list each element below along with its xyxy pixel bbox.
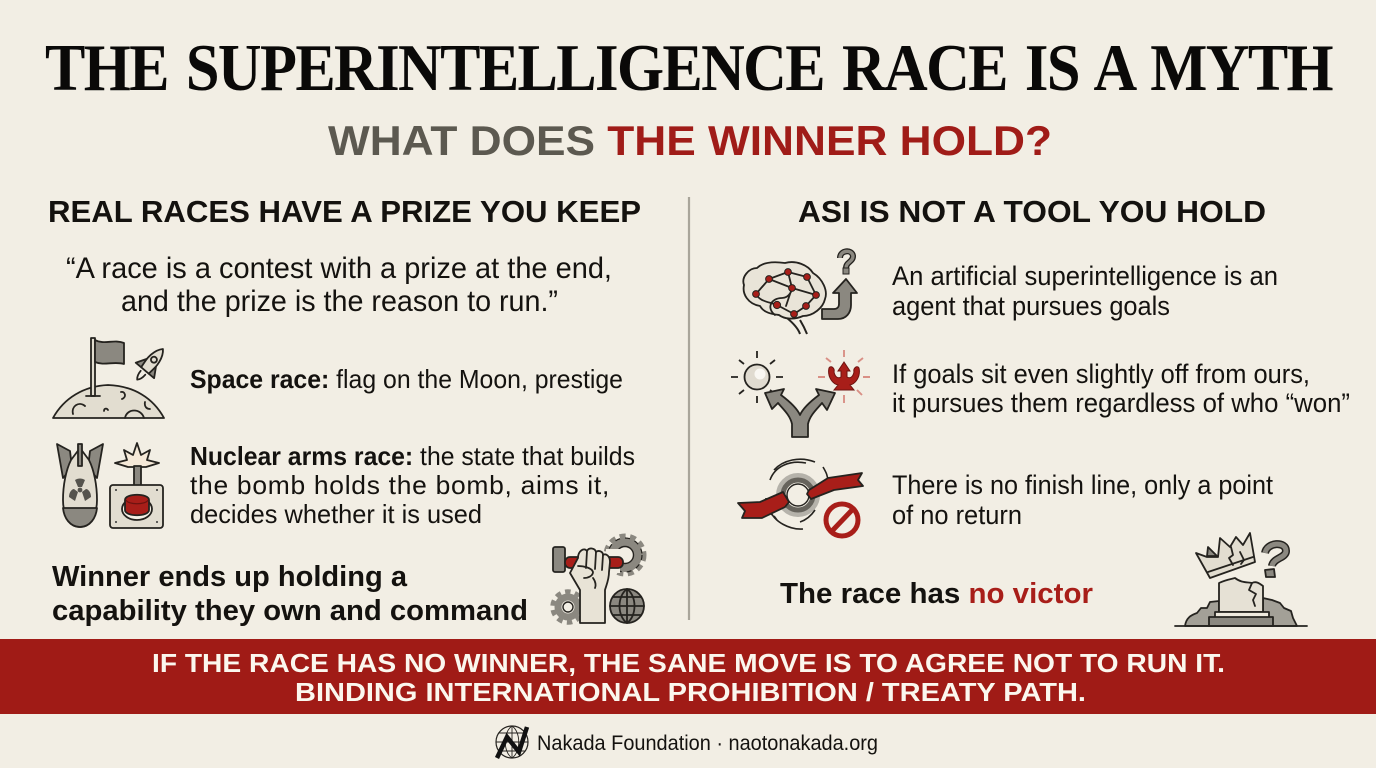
banner text: IF THE RACE HAS NO WINNER, THE SANE MOVE IS TO AGREE NOT TO RUN IT. xyxy=(152,648,1225,678)
callout: winner holds capability: Winner ends up holding a xyxy=(52,561,408,593)
banner xyxy=(0,639,1376,714)
footer text: Nakada Foundation · naotonakada.org xyxy=(537,732,878,755)
banner text: BINDING INTERNATIONAL PROHIBITION / TREATY PATH. xyxy=(295,677,1086,707)
text: agent: agent that pursues goals xyxy=(892,291,1170,321)
icon: broken crown on grave xyxy=(1175,533,1307,626)
text: agent: An artificial superintelligence is an xyxy=(892,261,1278,291)
text: nuclear arms race: Nuclear arms race: the state that builds xyxy=(190,441,646,471)
text: no finish line: of no return xyxy=(892,500,1022,530)
heading: real races: REAL RACES HAVE A PRIZE YOU KEEP xyxy=(48,194,641,229)
divider xyxy=(688,197,690,620)
text: nuclear arms race: the bomb holds the bomb, aims it, xyxy=(190,470,610,500)
text: space race: Space race: flag on the Moon, prestige xyxy=(190,364,623,394)
heading: asi: ASI IS NOT A TOOL YOU HOLD xyxy=(798,194,1266,229)
callout: winner holds capability: capability they own and command xyxy=(52,595,528,627)
icon: bomb and launch button xyxy=(57,443,163,528)
icon: fist with hammer, gears, globe xyxy=(552,536,644,623)
icon: vortex ribbon and prohibition sign xyxy=(738,459,863,536)
icon: brain with network and question arrow xyxy=(743,251,857,334)
panel: real races xyxy=(48,194,644,627)
panel: asi xyxy=(731,194,1350,626)
callout: no victor: The race has no victor xyxy=(780,578,1093,610)
quote: and the prize is the reason to run.” xyxy=(121,285,558,318)
quote: “A race is a contest with a prize at the end, xyxy=(66,252,612,285)
text: nuclear arms race: decides whether it is used xyxy=(190,499,482,529)
footer xyxy=(496,726,878,758)
icon: moon flag and rocket xyxy=(53,338,172,418)
text: no finish line: There is no finish line, only a point xyxy=(892,470,1274,500)
subtitle: WHAT DOES THE WINNER HOLD? xyxy=(328,117,1052,164)
icon: nakada logo xyxy=(496,726,528,758)
icon: diverging goals xyxy=(731,350,870,437)
text: goals off: it pursues them regardless of who “won” xyxy=(892,388,1350,418)
text: goals off: If goals sit even slightly off from ours, xyxy=(892,359,1310,389)
